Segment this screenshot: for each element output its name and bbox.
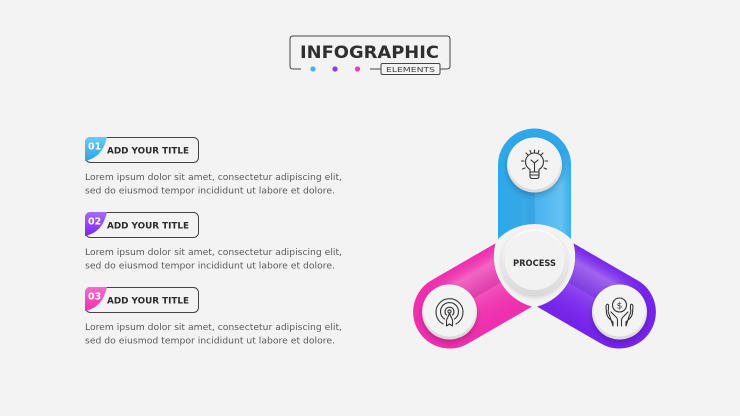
blue lobe xyxy=(498,128,571,239)
title pill 01: 01 xyxy=(88,142,101,152)
description 02: sed do eiusmod tempor incididunt ut labore et dolore. xyxy=(85,260,335,272)
process diagram xyxy=(413,128,656,348)
icon: light bulb xyxy=(522,150,548,178)
subtitle box xyxy=(381,64,440,74)
title pill 03: 03 xyxy=(88,292,101,302)
left disc with signal icon xyxy=(422,284,477,340)
icon: hands holding dollar: $ xyxy=(617,302,622,312)
title pill 01: ADD YOUR TITLE xyxy=(107,146,189,156)
subtitle box: ELEMENTS xyxy=(386,66,436,74)
description 01: Lorem ipsum dolor sit amet, consectetur adipiscing elit, xyxy=(85,172,342,183)
purple lobe xyxy=(537,243,656,348)
title pill 01 xyxy=(85,137,198,162)
top disc with bulb icon xyxy=(507,138,562,192)
right disc with money hands icon xyxy=(592,284,647,340)
description 01 xyxy=(85,172,342,196)
description 03: Lorem ipsum dolor sit amet, consectetur adipiscing elit, xyxy=(85,322,342,333)
item 03 xyxy=(85,287,342,346)
center process disc: PROCESS xyxy=(513,259,556,269)
decorative dots xyxy=(310,66,360,72)
description 03 xyxy=(85,322,342,346)
center process disc xyxy=(496,224,573,302)
title pill 03 xyxy=(85,287,198,312)
item 02 xyxy=(85,212,342,272)
description 01: sed do eiusmod tempor incididunt ut labore et dolore. xyxy=(85,186,335,196)
item 01 xyxy=(85,137,342,196)
title pill 02: 02 xyxy=(88,216,101,228)
description 03: sed do eiusmod tempor incididunt ut labore et dolore. xyxy=(85,336,335,346)
title pill 02 xyxy=(85,212,198,238)
icon: signal badge xyxy=(436,299,463,326)
title pill 03: ADD YOUR TITLE xyxy=(107,296,189,306)
header frame xyxy=(290,36,450,69)
title pill 02: ADD YOUR TITLE xyxy=(107,220,189,232)
pink lobe xyxy=(413,243,532,348)
description 02 xyxy=(85,247,342,272)
description 02: Lorem ipsum dolor sit amet, consectetur adipiscing elit, xyxy=(85,247,342,258)
header: infographic elements xyxy=(290,36,450,74)
title: INFOGRAPHIC xyxy=(300,43,439,62)
